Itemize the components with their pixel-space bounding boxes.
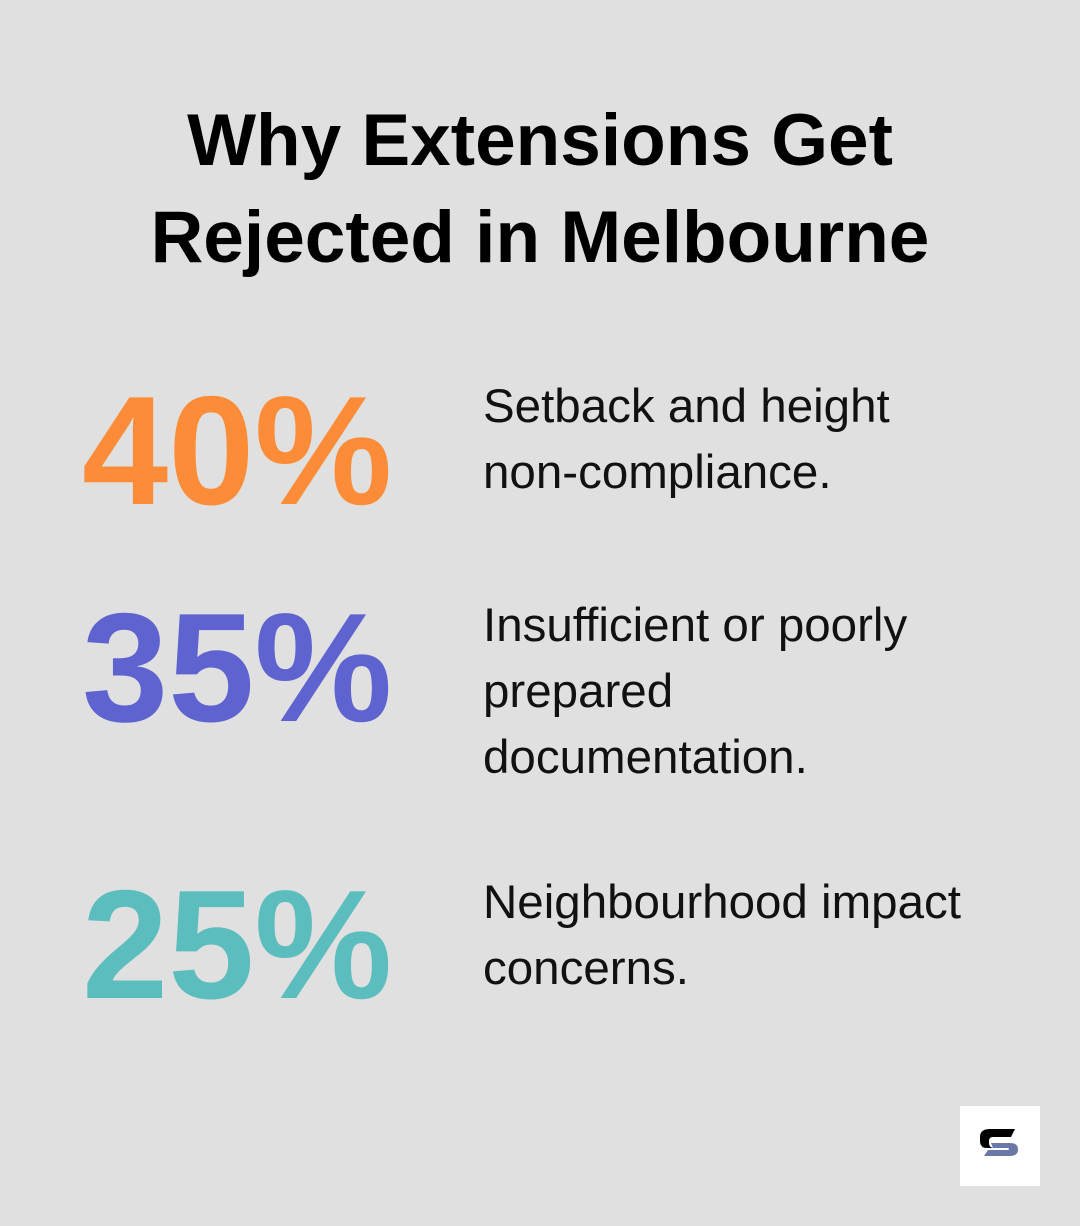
stat: 40%: 40% (82, 364, 392, 537)
text: setback (483, 380, 890, 499)
text: documentation: documentation. (483, 731, 808, 784)
text: neighbourhood (483, 876, 961, 995)
text: documentation: prepared (483, 665, 673, 718)
text: setback: non-compliance. (483, 446, 832, 499)
title: Rejected in Melbourne (151, 197, 929, 278)
stat: 25%: 25% (82, 858, 392, 1031)
stat: 35%: 35% (82, 581, 392, 754)
title: Why Extensions Get (187, 100, 893, 181)
text: setback: Setback and height (483, 380, 890, 433)
text: neighbourhood: Neighbourhood impact (483, 876, 961, 929)
text: documentation (483, 599, 908, 784)
text: neighbourhood: concerns. (483, 942, 689, 995)
icon: logo (960, 1106, 1040, 1186)
text: documentation: Insufficient or poorly (483, 599, 907, 652)
title (151, 100, 929, 278)
